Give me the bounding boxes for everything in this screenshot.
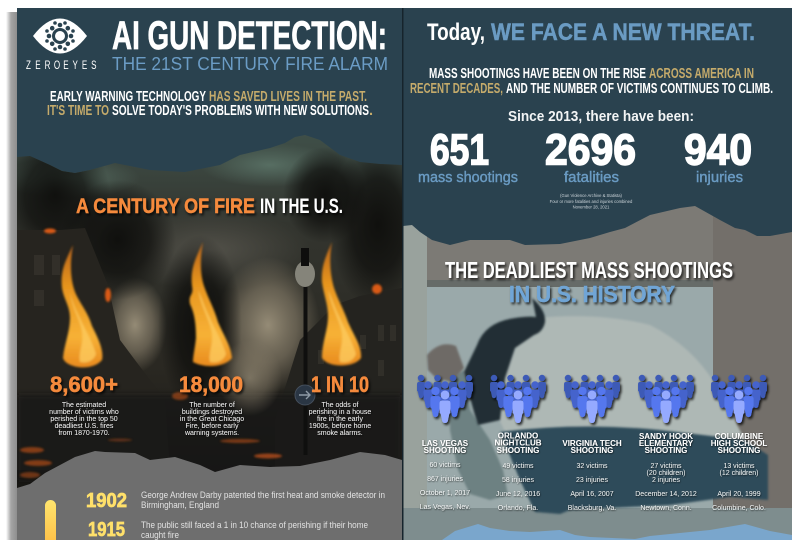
timeline entry 1902: Birmingham, England — [141, 500, 219, 510]
stat: 8,600+: 8,600+ — [50, 372, 118, 397]
column: Sandy Hook: 27 victims — [650, 463, 682, 470]
intro text: mass shootings: MASS SHOOTINGS HAVE BEEN ON THE RISE — [429, 66, 646, 82]
arm — [450, 370, 508, 500]
column: Orlando: 49 victims — [502, 463, 534, 470]
source note: (Gun Violence Archive & Statista) — [560, 193, 623, 198]
intro text: mass shootings: RECENT DECADES, — [410, 81, 503, 97]
intro text: EARLY WARNING TECHNOLOGY — [50, 89, 206, 105]
column: Sandy Hook: SHOOTING — [645, 446, 687, 455]
stat: 651 mass shootings: 651 — [430, 126, 489, 174]
intro text: . — [369, 103, 373, 119]
column: Columbine: HIGH SCHOOL — [711, 439, 767, 448]
building windows — [34, 255, 396, 376]
column: Orlando: SHOOTING — [497, 446, 539, 455]
source note: November 28, 2021 — [573, 204, 610, 210]
column: Columbine: Columbine, Colo. — [712, 505, 766, 512]
heading: deadliest mass shootings: IN U.S. HISTORY — [509, 281, 675, 307]
photo: burning city street — [17, 135, 402, 488]
intro text: mass shootings — [410, 66, 773, 97]
blue footer band — [403, 524, 792, 540]
icon: crowd — [638, 375, 694, 423]
stat: 1 in 10: perishing in a house — [309, 409, 371, 416]
intro text: IT'S TIME TO — [47, 103, 109, 119]
timeline entry 1902 — [86, 490, 385, 512]
stat: 8,600+: deadliest U.S. fires — [55, 423, 114, 430]
heading: deadliest mass shootings — [445, 257, 733, 307]
stat: 1 in 10: The odds of — [322, 402, 359, 409]
navy header background — [403, 8, 792, 245]
timeline entry 1915: The public still faced a 1 in 10 chance of perishing if their home — [141, 520, 368, 530]
column: Sandy Hook — [635, 375, 697, 512]
source note — [550, 193, 633, 210]
buildings left — [17, 228, 142, 372]
icon: flame 3 — [322, 242, 361, 366]
wordmark: ZEROEYES — [26, 60, 97, 72]
column: Virginia Tech: April 16, 2007 — [570, 491, 614, 498]
stat: 18,000: buildings destroyed — [182, 409, 242, 416]
panel: left fire column — [0, 8, 426, 540]
column: Columbine: April 20, 1999 — [717, 491, 761, 498]
stat: 8,600+: from 1870-1970. — [58, 430, 110, 437]
stat: 940 injuries: injuries — [696, 170, 743, 186]
column: Virginia Tech: 32 victims — [576, 463, 608, 470]
stat: 18,000 — [179, 372, 244, 437]
stat: 651 mass shootings — [418, 126, 518, 186]
stat: 18,000: warning systems. — [184, 430, 239, 437]
icon: flame 1 — [62, 245, 102, 367]
column: Orlando: ORLANDO — [498, 432, 538, 440]
column: Virginia Tech: Blacksburg, Va. — [568, 505, 616, 512]
column: Sandy Hook: SANDY HOOK — [639, 432, 693, 441]
logo: ZeroEyes — [26, 18, 97, 72]
stat: 8,600+: perished in the top 50 — [50, 416, 118, 423]
column: Columbine: SHOOTING — [718, 446, 760, 455]
stat: 651 mass shootings: mass shootings — [418, 170, 518, 186]
column: Virginia Tech: SHOOTING — [571, 446, 613, 455]
column: Las Vegas: SHOOTING — [424, 446, 466, 455]
column: Orlando: 58 injuries — [502, 477, 534, 484]
column: Virginia Tech: 23 injuries — [576, 477, 608, 484]
icon: crowd — [417, 375, 473, 423]
stat: 8,600+ — [49, 372, 119, 437]
stat: 8,600+: The estimated — [62, 402, 106, 409]
panel: right column — [403, 8, 792, 540]
top white margin — [0, 0, 792, 8]
icon: eye — [33, 18, 87, 54]
divider strip — [402, 8, 404, 540]
column: Las Vegas: 867 injuries — [427, 476, 463, 483]
stat: 1 in 10: 1 IN 10 — [311, 372, 369, 397]
timeline bar — [45, 500, 56, 540]
column: Orlando: June 12, 2016 — [496, 491, 540, 498]
column: Orlando: NIGHTCLUB — [494, 438, 542, 448]
stat: 18,000: The number of — [189, 402, 235, 409]
stat: 8,600+: number of victims who — [49, 409, 119, 416]
gray timeline band — [17, 451, 402, 540]
icon: crowd — [711, 375, 767, 423]
icon: flame 2 — [190, 242, 232, 366]
title: AI GUN DETECTION: — [112, 14, 387, 58]
column: Orlando: Orlando, Fla. — [498, 505, 538, 512]
photo: person hiding under desk — [403, 200, 792, 540]
timeline entry 1915 — [88, 519, 368, 540]
heading: a century of fire: IN THE U.S. — [260, 195, 343, 218]
stat: 18,000: 18,000 — [179, 372, 243, 397]
page shadow — [0, 8, 17, 540]
stat: 1 in 10: 1900s, before home — [309, 423, 371, 430]
column: Columbine — [711, 375, 767, 512]
column: Columbine: 13 victims — [723, 463, 755, 470]
column: Sandy Hook: Newtown, Conn. — [640, 505, 692, 512]
column: Sandy Hook: 2 injuries — [652, 477, 681, 484]
stat: 18,000: in the Great Chicago — [180, 416, 244, 423]
stat: 1 in 10 — [309, 372, 371, 437]
intro text — [47, 89, 373, 119]
column: Virginia Tech: VIRGINIA TECH — [562, 439, 622, 448]
stat: 18,000: Fire, before early — [186, 423, 239, 430]
column: Sandy Hook: ELEMENTARY — [639, 439, 694, 448]
stat: 1 in 10: fire in the early — [317, 416, 363, 423]
hair — [464, 298, 545, 425]
column: Virginia Tech — [562, 375, 622, 512]
stat: 940 injuries: 940 — [684, 126, 752, 174]
intro text: HAS SAVED LIVES IN THE PAST. — [209, 89, 367, 105]
heading: a century of fire: A CENTURY OF FIRE — [76, 195, 255, 218]
shirt — [490, 316, 745, 440]
column: Columbine: COLUMBINE — [715, 432, 764, 441]
since 2013 line: Since 2013, there have been: — [508, 109, 694, 125]
icon: crowd — [564, 375, 620, 423]
column: Las Vegas: October 1, 2017 — [420, 490, 470, 497]
heading: today we face a new threat: WE FACE A NEW THREAT. — [491, 19, 755, 46]
heading: today we face a new threat: Today, — [427, 19, 485, 46]
stat: 2696 fatalities: fatalities — [564, 170, 619, 186]
column: Las Vegas: 60 victims — [429, 462, 461, 469]
street lamp — [295, 248, 315, 455]
timeline entry 1902: 1902 — [86, 490, 127, 512]
column: Sandy Hook: December 14, 2012 — [635, 491, 697, 498]
column: Sandy Hook: (20 children) — [647, 470, 685, 477]
hand — [427, 344, 464, 382]
column: Orlando — [490, 375, 546, 512]
road sign — [295, 385, 315, 405]
source note: Four or more fatalities and injuries combined — [550, 199, 633, 204]
column: Las Vegas: Las Vegas, Nev. — [420, 504, 470, 511]
stat: 1 in 10: smoke alarms. — [317, 430, 363, 437]
trousers — [500, 426, 768, 514]
intro text: SOLVE TODAY'S PROBLEMS WITH NEW SOLUTIONS — [112, 103, 369, 119]
column: Las Vegas — [417, 375, 473, 511]
column: Las Vegas: LAS VEGAS — [422, 439, 469, 448]
stat: 2696 fatalities: 2696 — [545, 126, 636, 174]
timeline entry 1915: caught fire — [141, 530, 179, 540]
icon: crowd — [490, 375, 546, 423]
subtitle: THE 21ST CENTURY FIRE ALARM — [112, 54, 388, 74]
column: Columbine: (12 children) — [720, 470, 758, 477]
timeline entry 1902: George Andrew Darby patented the first heat and smoke detector in — [141, 490, 385, 500]
buildings right — [286, 292, 402, 386]
fires — [20, 228, 382, 478]
